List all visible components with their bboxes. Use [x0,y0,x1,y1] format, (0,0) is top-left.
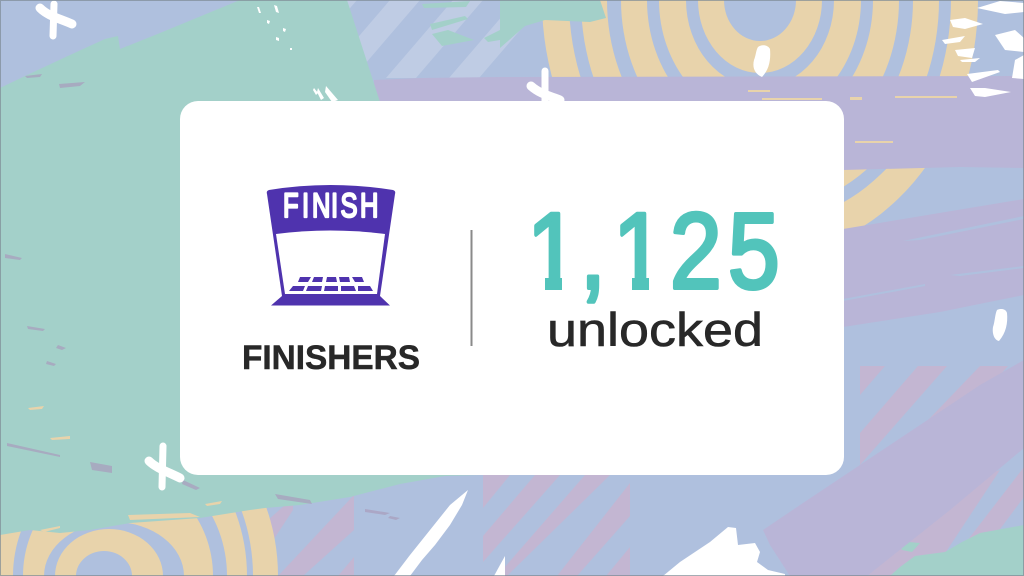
heading: finishers: FINISHERS [242,339,420,377]
white sliver bottom [494,556,505,576]
lavender stroke lower right [763,360,1024,576]
number: 1,125: , [580,191,606,312]
white brush streak bottom [394,490,468,576]
white brush blob bottom [663,527,785,576]
number: 1,125 [534,210,778,304]
finish lettering: FINISH [283,188,378,225]
white cross card top [531,71,560,105]
light diagonal stripes top [260,0,546,78]
white scratch marks top centre [257,5,338,102]
label: unlocked: unlocked [547,303,763,356]
blue scratches in lavender [843,216,1024,301]
green brush stroke left [0,0,480,535]
green patch bottom right [890,525,1024,576]
number: 1,125: 5 [728,191,780,312]
number: 1,125: 1 [527,191,579,312]
white blob top [753,45,770,77]
tan flecks on band [748,90,957,143]
tan flecks above bottom arcs [28,406,222,532]
divider [470,230,472,346]
white scratches top right [942,1,1024,97]
concentric arcs top [542,0,978,257]
icon grid tiles [289,277,373,291]
green fleck bottom right [897,541,920,552]
purple flecks on green [5,74,400,520]
white cross card corner [149,446,180,487]
number: 1,125: 1 [613,191,665,312]
pink stripes right [860,366,1024,576]
lavender stroke right [843,199,1024,327]
white cross top left [40,4,72,36]
lavender horizontal band [374,76,1024,180]
icon: finish line gantry [267,185,395,306]
white blob right [993,309,1007,341]
white card panel [180,101,844,475]
green streaks top [422,0,606,48]
number: 1,125: 2 [670,191,722,312]
concentric arcs bottom left [0,386,278,576]
pink stripes below card [268,475,630,576]
